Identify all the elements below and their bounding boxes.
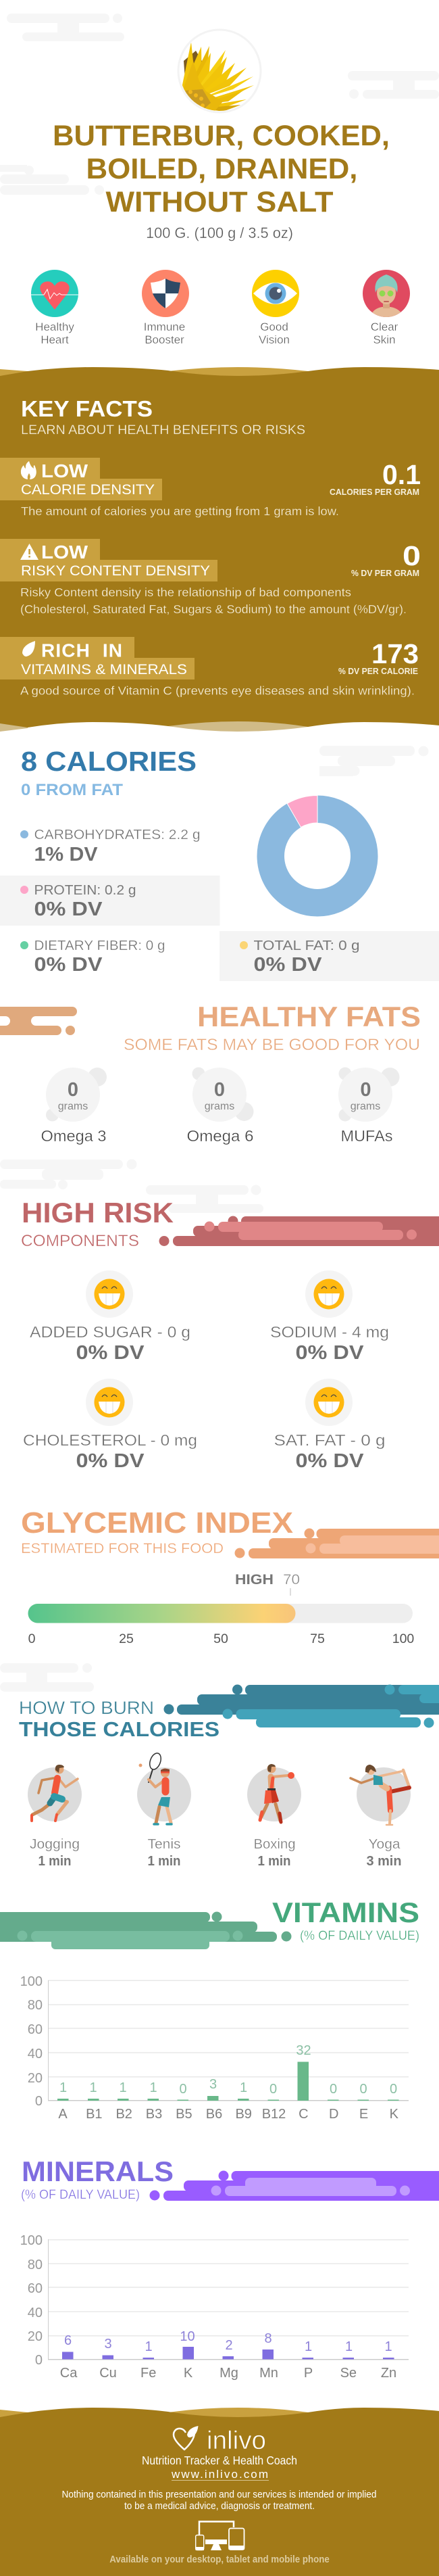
fact: risky content density: (Cholesterol, Saturated Fat, Sugars & Sodium) to the amount (%DV/gr). xyxy=(20,602,407,616)
risk: added sugar: 0% DV xyxy=(76,1342,145,1364)
heading: glycemic index: ESTIMATED FOR THIS FOOD xyxy=(21,1540,224,1556)
bar chart: vitamins: 1 xyxy=(59,2080,67,2095)
bar chart: vitamins: B6 xyxy=(206,2107,222,2122)
tagline and website: Nutrition Tracker & Health Coach xyxy=(142,2454,297,2467)
bar chart: vitamins: 1 xyxy=(119,2080,127,2095)
activity: jogging xyxy=(28,1765,82,1869)
benefit: immune booster xyxy=(142,270,189,346)
benefit: clear skin: Skin xyxy=(373,333,396,346)
risk: added sugar: ADDED SUGAR - 0 g xyxy=(30,1323,190,1341)
benefit: healthy heart: Heart xyxy=(41,333,69,346)
fact: risky content density: 0 xyxy=(403,540,421,571)
disclaimer: to be a medical advice, diagnosis or treatment. xyxy=(124,2501,315,2512)
heading: 8 calories: 0 FROM FAT xyxy=(21,781,123,799)
benefit: good vision: Good xyxy=(260,320,288,333)
tagline and website xyxy=(142,2454,297,2481)
bar chart: vitamins: 0 xyxy=(179,2082,187,2097)
heading: how to burn those calories xyxy=(19,1698,220,1741)
risk: cholesterol: 0% DV xyxy=(76,1450,145,1472)
heading: high risk: HIGH RISK xyxy=(22,1197,174,1229)
bar chart: minerals: 1 xyxy=(305,2339,312,2354)
stat: omega 6 xyxy=(186,1067,254,1145)
decoration: vitamins ribbon xyxy=(0,1912,292,1949)
risk: sodium: 0% DV xyxy=(296,1342,364,1364)
fact: calorie density: 0.1 xyxy=(382,459,421,490)
logo: inlivo: inlivo xyxy=(207,2427,266,2455)
stat: mufas: 0 xyxy=(360,1079,371,1101)
legend: protein: PROTEIN: 0.2 g xyxy=(34,883,136,898)
activity: boxing: 1 min xyxy=(258,1854,290,1869)
bar chart: minerals: 1 xyxy=(145,2339,153,2354)
disclaimer: Nothing contained in this presentation and our services is intended or implied xyxy=(62,2489,377,2500)
heading: glycemic index xyxy=(21,1506,293,1556)
fact: risky content density: % DV PER GRAM xyxy=(351,568,419,578)
activity: tennis: Tenis xyxy=(147,1836,181,1852)
fact: rich in vitamins and minerals: VITAMINS & MINERALS xyxy=(21,661,187,677)
bar chart: vitamins: 20 xyxy=(28,2071,43,2086)
legend: dietary fiber: DIETARY FIBER: 0 g xyxy=(34,938,165,953)
bar chart: minerals: Zn xyxy=(381,2366,396,2381)
activity: jogging: Jogging xyxy=(30,1836,80,1852)
heading: healthy fats: SOME FATS MAY BE GOOD FOR YOU xyxy=(124,1036,420,1054)
bar chart: vitamins: B9 xyxy=(235,2107,252,2122)
risk: saturated fat: SAT. FAT - 0 g xyxy=(274,1431,385,1449)
stat: omega 3: 0 xyxy=(68,1079,78,1101)
fact: calorie density: CALORIE DENSITY xyxy=(21,481,155,498)
bar chart: vitamins: B5 xyxy=(176,2107,192,2122)
bar chart: vitamins xyxy=(20,1974,409,2122)
legend: carbohydrates xyxy=(20,828,200,865)
bar chart: vitamins: 0 xyxy=(390,2082,397,2097)
risk: saturated fat xyxy=(274,1379,385,1472)
bar chart: vitamins: B12 xyxy=(262,2107,286,2122)
gauge: glycemic index value: HIGH xyxy=(235,1572,274,1588)
stat: omega 6: 0 xyxy=(214,1079,225,1101)
bar chart: vitamins: 32 xyxy=(296,2043,311,2058)
risk: saturated fat: 0% DV xyxy=(296,1450,364,1472)
gauge: glycemic index value xyxy=(28,1572,414,1646)
background clouds xyxy=(0,14,439,1692)
bar chart: vitamins: 0 xyxy=(330,2082,337,2097)
fact: rich in vitamins and minerals: RICH IN xyxy=(41,640,122,661)
gauge: glycemic index value: 0 xyxy=(28,1631,36,1646)
bar chart: minerals xyxy=(20,2233,409,2381)
fact: calorie density: The amount of calories you are getting from 1 gram is low. xyxy=(21,504,339,518)
heading: minerals: MINERALS xyxy=(22,2155,174,2187)
benefit: clear skin xyxy=(363,270,410,346)
fact: calorie density: LOW xyxy=(41,460,88,481)
gauge: glycemic index value: 70 xyxy=(283,1572,300,1588)
bar chart: minerals: 1 xyxy=(345,2339,353,2354)
donut chart: calorie sources xyxy=(271,795,364,903)
decoration: burn ribbon xyxy=(163,1685,439,1728)
bar chart: vitamins: 1 xyxy=(240,2080,247,2095)
legend: dietary fiber xyxy=(20,938,165,976)
heading: how to burn those calories: HOW TO BURN xyxy=(19,1698,154,1718)
bar chart: vitamins: B2 xyxy=(115,2107,132,2122)
bar chart: vitamins: B1 xyxy=(86,2107,103,2122)
bar chart: vitamins: 0 xyxy=(35,2094,43,2109)
bar chart: minerals: 10 xyxy=(180,2329,195,2344)
bar chart: vitamins: K xyxy=(390,2107,399,2122)
heading: vitamins xyxy=(272,1897,419,1943)
heading: how to burn those calories: THOSE CALORIES xyxy=(19,1717,220,1741)
bar chart: minerals: 60 xyxy=(28,2281,43,2296)
heading: 8 calories: 8 CALORIES xyxy=(21,746,197,777)
activity: boxing xyxy=(247,1764,301,1869)
bar chart: vitamins: E xyxy=(359,2107,368,2122)
bar chart: minerals: Fe xyxy=(140,2366,156,2381)
title: BOILED, DRAINED, xyxy=(86,153,358,185)
risk: sodium: SODIUM - 4 mg xyxy=(270,1323,389,1341)
fact: rich in vitamins and minerals xyxy=(0,637,419,698)
heading: high risk xyxy=(21,1197,174,1250)
heading: minerals: (% OF DAILY VALUE) xyxy=(21,2188,140,2202)
risk: sodium xyxy=(270,1270,389,1364)
bar chart: minerals: P xyxy=(304,2366,313,2381)
bar chart: vitamins: 0 xyxy=(269,2082,277,2097)
stat: mufas: MUFAs xyxy=(340,1127,393,1145)
bar chart: minerals: 3 xyxy=(104,2337,112,2352)
bar chart: vitamins: 100 xyxy=(20,1974,43,1989)
legend: protein: 0% DV xyxy=(34,899,103,920)
risk: added sugar xyxy=(30,1270,190,1364)
fact: rich in vitamins and minerals: % DV PER CALORIE xyxy=(338,666,418,676)
fact: risky content density: RISKY CONTENT DENSITY xyxy=(21,563,210,579)
bar chart: vitamins: C xyxy=(299,2107,309,2122)
bar chart: minerals: 6 xyxy=(64,2333,72,2348)
heading: vitamins: VITAMINS xyxy=(272,1897,419,1928)
logo: inlivo xyxy=(174,2426,266,2455)
fact: risky content density: Risky Content density is the relationship of bad components xyxy=(20,586,351,599)
stat: omega 3: grams xyxy=(58,1101,88,1112)
decoration: high risk ribbon xyxy=(159,1216,439,1246)
heading: healthy fats: HEALTHY FATS xyxy=(197,1001,421,1032)
fact: rich in vitamins and minerals: 173 xyxy=(371,638,419,669)
activity: yoga: Yoga xyxy=(369,1836,401,1852)
bar chart: minerals: 40 xyxy=(28,2306,43,2320)
bar chart: minerals: 100 xyxy=(20,2233,43,2248)
fact: calorie density xyxy=(0,458,421,518)
bar chart: vitamins: 1 xyxy=(89,2080,97,2095)
legend: total fat: 0% DV xyxy=(254,954,322,976)
bar chart: minerals: 8 xyxy=(264,2331,272,2346)
activity: tennis: 1 min xyxy=(147,1854,181,1869)
activity: yoga: 3 min xyxy=(366,1854,401,1869)
tagline and website: www.inlivo.com xyxy=(171,2468,268,2481)
benefit: clear skin: Clear xyxy=(371,320,398,333)
bar chart: vitamins: B3 xyxy=(146,2107,162,2122)
benefit: good vision xyxy=(252,270,299,346)
heading: high risk: COMPONENTS xyxy=(21,1232,139,1250)
legend: total fat xyxy=(220,931,439,981)
decoration: healthy fats ribbon xyxy=(0,1007,77,1035)
bar chart: minerals: Ca xyxy=(60,2366,78,2381)
bar chart: vitamins: 0 xyxy=(359,2082,367,2097)
bar chart: minerals: 20 xyxy=(28,2329,43,2344)
bar chart: vitamins: 40 xyxy=(28,2047,43,2061)
decoration: glycemic ribbon xyxy=(235,1528,439,1558)
bar chart: vitamins: D xyxy=(329,2107,338,2122)
heading: glycemic index: GLYCEMIC INDEX xyxy=(21,1506,293,1540)
bar chart: minerals: Mn xyxy=(259,2366,278,2381)
bar chart: minerals: 1 xyxy=(384,2339,392,2354)
fact: rich in vitamins and minerals: A good source of Vitamin C (prevents eye diseases and skin wrinkling). xyxy=(20,684,415,698)
gauge: glycemic index value: 75 xyxy=(310,1631,325,1646)
bar chart: minerals: 80 xyxy=(28,2258,43,2272)
title: WITHOUT SALT xyxy=(105,186,334,218)
stat: omega 3: Omega 3 xyxy=(41,1127,107,1145)
bar chart: minerals: 2 xyxy=(225,2338,233,2353)
heading: minerals xyxy=(21,2155,174,2202)
legend: carbohydrates: CARBOHYDRATES: 2.2 g xyxy=(34,828,200,842)
title xyxy=(53,120,390,218)
legend: carbohydrates: 1% DV xyxy=(34,844,98,865)
fact: calorie density: CALORIES PER GRAM xyxy=(330,487,419,497)
fact: risky content density: LOW xyxy=(41,542,88,563)
heading: key facts: KEY FACTS xyxy=(21,396,153,421)
hero image: butterbur flower xyxy=(178,30,261,114)
legend: protein xyxy=(0,876,220,926)
activity: yoga xyxy=(351,1765,411,1869)
activity: tennis xyxy=(137,1752,191,1869)
stat: mufas xyxy=(338,1067,400,1145)
bar chart: vitamins: 3 xyxy=(209,2077,217,2092)
serving size: 100 G. (100 g / 3.5 oz) xyxy=(146,224,293,241)
activity: boxing: Boxing xyxy=(254,1836,296,1852)
bar chart: minerals: 0 xyxy=(35,2353,43,2368)
availability note: Available on your desktop, tablet and mobile phone xyxy=(109,2554,330,2565)
fact: risky content density xyxy=(0,539,421,616)
benefit: immune booster: Booster xyxy=(145,333,184,346)
panel: footer xyxy=(0,2408,439,2576)
benefit: healthy heart: Healthy xyxy=(35,320,74,333)
activity: jogging: 1 min xyxy=(38,1854,72,1869)
bar chart: minerals: Se xyxy=(340,2366,357,2381)
bar chart: vitamins: 1 xyxy=(149,2080,157,2095)
risk: cholesterol: CHOLESTEROL - 0 mg xyxy=(23,1431,197,1449)
legend: total fat: TOTAL FAT: 0 g xyxy=(254,938,359,953)
bar chart: minerals: K xyxy=(184,2366,193,2381)
risk: cholesterol xyxy=(23,1379,197,1472)
stat: omega 6: Omega 6 xyxy=(186,1127,254,1145)
gauge: glycemic index value: 25 xyxy=(119,1631,134,1646)
panel: key facts: LEARN ABOUT HEALTH BENEFITS OR RISKS xyxy=(21,423,305,437)
gauge: glycemic index value: 50 xyxy=(213,1631,228,1646)
title: BUTTERBUR, COOKED, xyxy=(53,120,390,152)
stat: omega 6: grams xyxy=(205,1101,234,1112)
bar chart: minerals: Mg xyxy=(220,2366,238,2381)
stat: omega 3 xyxy=(41,1068,107,1145)
bar chart: vitamins: 60 xyxy=(28,2022,43,2037)
benefit: immune booster: Immune xyxy=(144,320,185,333)
bar chart: minerals: Cu xyxy=(99,2366,117,2381)
gauge: glycemic index value: 100 xyxy=(392,1631,414,1646)
panel: key facts xyxy=(0,367,439,732)
icon: devices xyxy=(196,2522,244,2550)
decoration: minerals ribbon xyxy=(150,2170,439,2201)
benefit: healthy heart xyxy=(31,270,78,346)
disclaimer xyxy=(62,2489,377,2512)
heading: 8 calories xyxy=(21,746,197,799)
legend: dietary fiber: 0% DV xyxy=(34,954,103,976)
heading: healthy fats xyxy=(124,1001,421,1054)
bar chart: vitamins: A xyxy=(58,2107,68,2122)
stat: mufas: grams xyxy=(351,1101,380,1112)
benefit: good vision: Vision xyxy=(259,333,290,346)
heading: vitamins: (% OF DAILY VALUE) xyxy=(300,1929,419,1943)
bar chart: vitamins: 80 xyxy=(28,1998,43,2013)
